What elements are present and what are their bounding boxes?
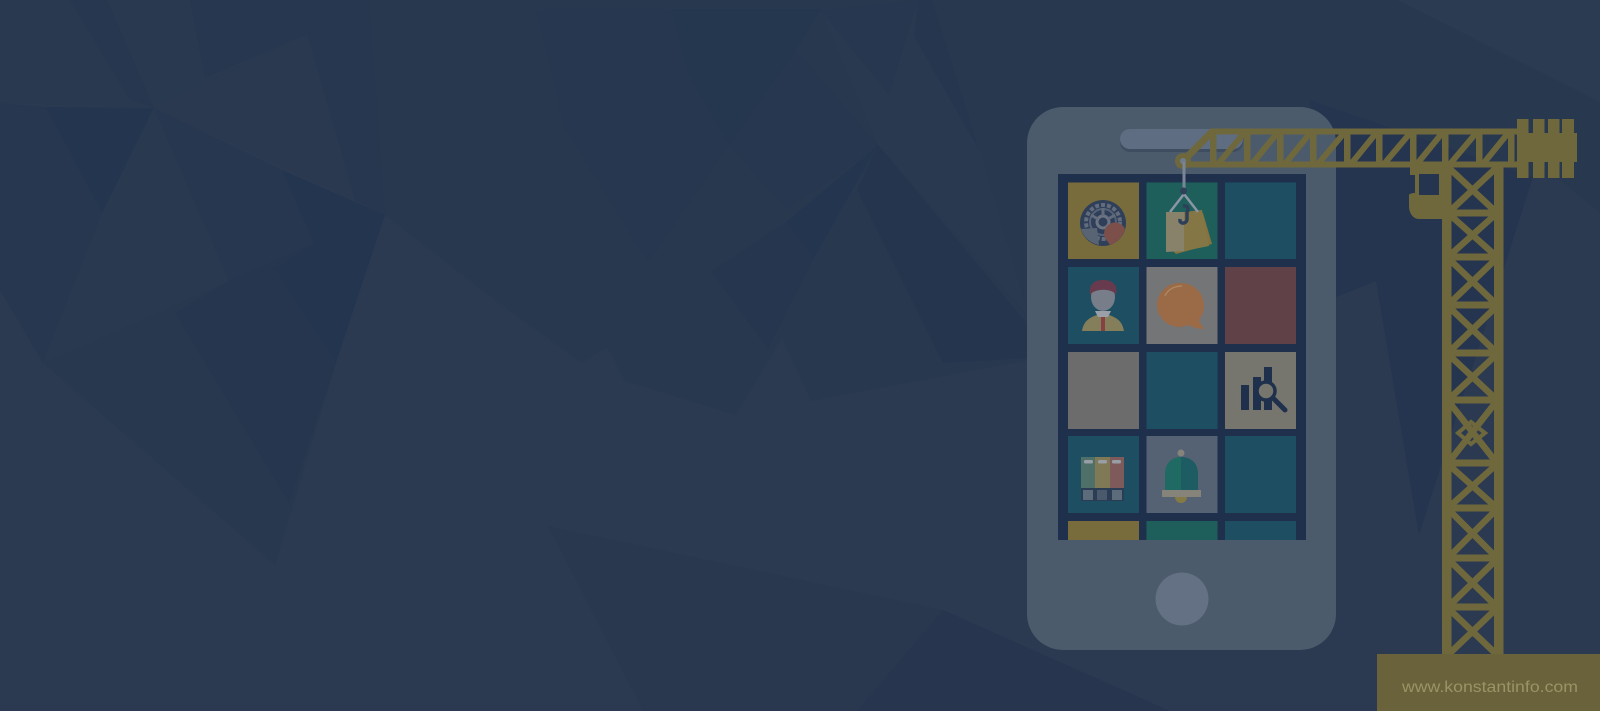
pulley knot bbox=[1180, 188, 1187, 194]
icon: bar chart with magnifier bbox=[1241, 367, 1285, 410]
sling lines bbox=[1170, 194, 1198, 212]
hook bbox=[1180, 206, 1188, 223]
speaker slot bbox=[1120, 129, 1243, 152]
phone bbox=[1027, 107, 1336, 650]
hook and shopping bag bbox=[1166, 162, 1212, 254]
phone screen bbox=[1058, 174, 1306, 540]
bag right panel bbox=[1184, 210, 1209, 251]
hook rope bbox=[1182, 162, 1186, 189]
home button bbox=[1156, 572, 1208, 626]
bag left panel bbox=[1166, 212, 1184, 252]
crane cab bbox=[1409, 166, 1445, 219]
crane base block bbox=[1377, 654, 1600, 711]
icon: binders bbox=[1081, 457, 1124, 501]
app tile grid bbox=[1068, 182, 1296, 540]
icon: gears bbox=[1080, 200, 1126, 246]
phone body bbox=[1027, 107, 1336, 650]
icon: chat bubble bbox=[1157, 283, 1204, 329]
website url: www.konstantinfo.com bbox=[1401, 679, 1578, 696]
icon: person bbox=[1082, 280, 1124, 331]
crane counterweight bbox=[1517, 119, 1577, 178]
icon: service bell bbox=[1162, 450, 1201, 503]
crane tower bbox=[1442, 166, 1504, 656]
bag back flap bbox=[1172, 213, 1212, 254]
crane bbox=[1175, 119, 1600, 711]
crane jib bbox=[1175, 128, 1519, 169]
